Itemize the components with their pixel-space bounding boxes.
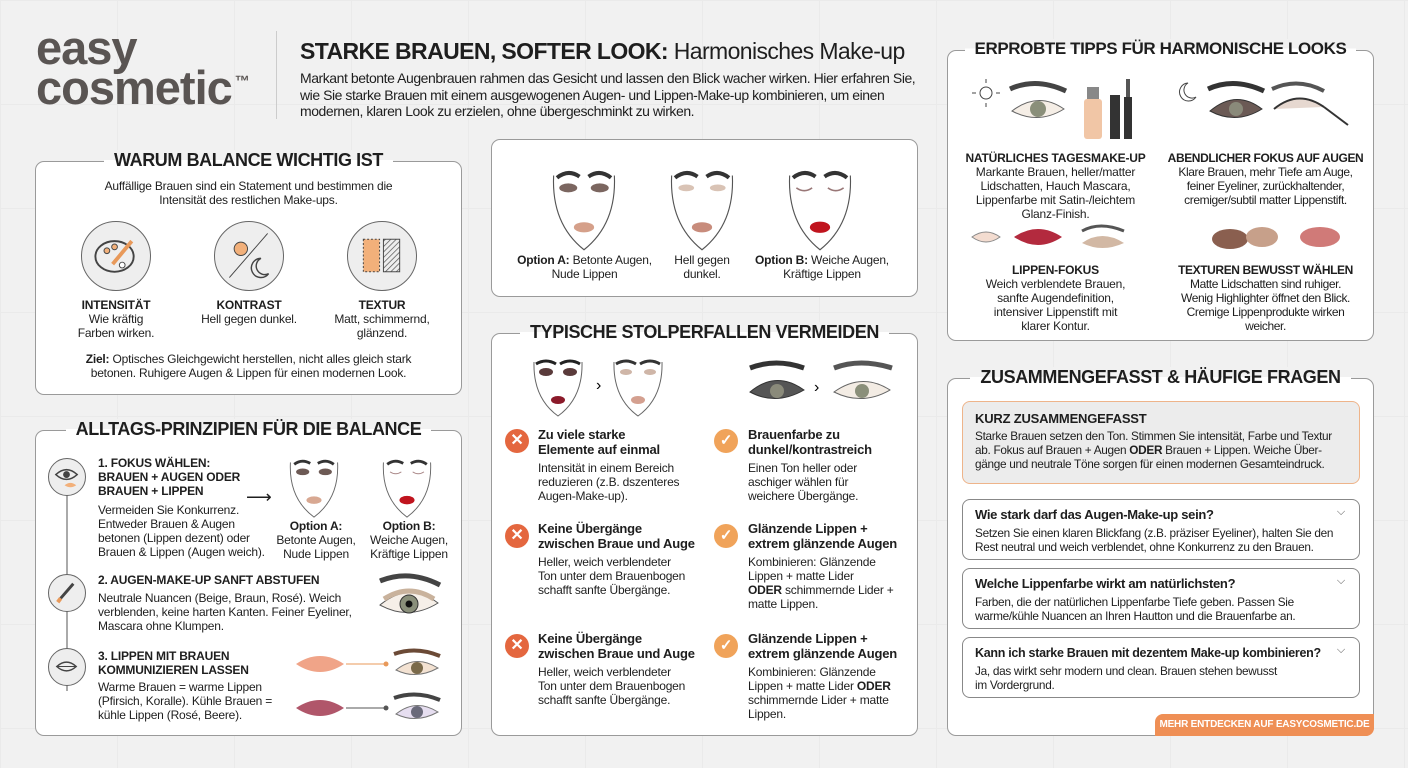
faq 1: Wie stark darf das Augen-Make-up sein? — [975, 507, 1214, 522]
panel: alltags-prinzipien: Brauen & Lippen (Augen weich). — [98, 545, 265, 559]
panel: options faces: Option A: Betonte Augen, — [517, 253, 652, 267]
panel: warum balance: Matt, schimmernd, — [334, 312, 430, 326]
panel: stolperfallen: ✕ — [510, 527, 524, 544]
button: mehr entdecken: MEHR ENTDECKEN AUF EASYCOSMETIC.DE — [1159, 719, 1370, 730]
faq 3: Kann ich starke Brauen mit dezentem Make-up kombinieren? — [975, 646, 1321, 660]
icon: texture — [347, 221, 417, 291]
panel: alltags-prinzipien: KOMMUNIZIEREN LASSEN — [98, 663, 249, 677]
panel: stolperfallen: schimmernde Lider + matte — [748, 693, 889, 707]
panel: warum balance — [35, 161, 462, 395]
panel: erprobte tipps — [947, 50, 1374, 341]
panel: erprobte tipps: ABENDLICHER FOKUS AUF AUGEN — [1168, 151, 1363, 165]
panel: stolperfallen: zwischen Braue und Auge — [538, 646, 695, 661]
panel: warum balance: Auffällige Brauen sind ein Statement und bestimmen die — [105, 179, 392, 193]
panel: warum balance: Wie kräftig — [89, 312, 143, 326]
face: neutral — [670, 170, 734, 250]
panel: alltags-prinzipien: Vermeiden Sie Konkurrenz. — [98, 503, 239, 517]
panel: stolperfallen: Elemente auf einmal — [538, 442, 660, 457]
panel: alltags-prinzipien: Option B: — [383, 519, 435, 533]
panel: stolperfallen: schafft sanfte Übergänge. — [538, 583, 670, 597]
panel: alltags-prinzipien: verblenden, keine harten Kanten. Feiner Eyeliner, — [98, 605, 352, 619]
panel: alltags-prinzipien: Option A: — [290, 519, 342, 533]
panel: stolperfallen: Intensität in einem Bereich — [538, 461, 674, 475]
panel: stolperfallen: Ton unter dem Brauenbogen — [538, 679, 685, 693]
panel: alltags-prinzipien: Neutrale Nuancen (Beige, Braun, Rosé). Weich — [98, 591, 341, 605]
panel: erprobte tipps: TEXTUREN BEWUSST WÄHLEN — [1178, 263, 1353, 277]
text: ERPROBTE TIPPS FÜR HARMONISCHE LOOKS — [975, 39, 1346, 58]
panel: erprobte tipps: Glanz-Finish. — [1021, 207, 1090, 221]
faces comparison: › — [596, 377, 601, 394]
panel: warum balance: KONTRAST — [216, 298, 282, 312]
faq 3: Ja, das wirkt sehr modern und clean. Brauen stehen bewusst — [975, 664, 1277, 678]
intro text: modernen, klaren Look zu erzielen, ohne übergeschminkt zu wirken. — [300, 103, 694, 119]
panel: alltags-prinzipien: BRAUEN + AUGEN ODER — [98, 470, 240, 484]
faces comparison — [533, 360, 663, 416]
icon: textures — [1212, 227, 1340, 249]
icon: brush — [48, 574, 86, 612]
faq 2: warme/kühle Nuancen an Ihren Hautton und die Brauenfarbe an. — [975, 609, 1295, 623]
panel: stolperfallen: schafft sanfte Übergänge. — [538, 693, 670, 707]
icon: evening look — [1179, 81, 1348, 126]
panel: erprobte tipps: Klare Brauen, mehr Tiefe am Auge, — [1178, 165, 1353, 179]
panel: alltags-prinzipien: BRAUEN + LIPPEN — [98, 484, 203, 498]
panel: alltags-prinzipien: Kräftige Lippen — [370, 547, 448, 561]
faq 3: im Vordergrund. — [975, 678, 1054, 692]
text: TYPISCHE STOLPERFALLEN VERMEIDEN — [530, 322, 879, 342]
panel: erprobte tipps: klarer Kontur. — [1021, 319, 1090, 333]
icon: day look — [972, 79, 1132, 139]
intro text: Markant betonte Augenbrauen rahmen das Gesicht und lassen den Blick wacher wirken. Hier erfahren Sie, — [300, 70, 915, 86]
text: ZUSAMMENGEFASST & HÄUFIGE FRAGEN — [980, 367, 1341, 387]
panel: erprobte tipps: sanfte Augendefinition, — [997, 291, 1114, 305]
panel: warum balance: Hell gegen dunkel. — [201, 312, 297, 326]
panel: alltags-prinzipien: Mascara ohne Klumpen. — [98, 619, 224, 633]
panel: warum balance: INTENSITÄT — [82, 298, 150, 312]
panel: erprobte tipps: Cremige Lippenprodukte wirken — [1187, 305, 1344, 319]
panel: alltags-prinzipien: ⟶ — [246, 487, 272, 507]
panel: options faces: Option B: Weiche Augen, — [755, 253, 889, 267]
panel: warum balance: Farben wirken. — [78, 326, 154, 340]
icon: lips — [48, 648, 86, 686]
panel: stolperfallen: Lippen + matte Lider ODER — [748, 679, 891, 693]
button: mehr entdecken — [1155, 714, 1374, 736]
summary box — [962, 401, 1360, 484]
panel: erprobte tipps: NATÜRLICHES TAGESMAKE-UP — [965, 151, 1146, 165]
text: ALLTAGS-PRINZIPIEN FÜR DIE BALANCE — [76, 419, 421, 439]
summary box: Starke Brauen setzen den Ton. Stimmen Sie intensität, Farbe und Textur — [975, 429, 1332, 443]
panel: alltags-prinzipien: (Pfirsich, Koralle). Kühle Brauen = — [98, 694, 272, 708]
panel: stolperfallen: Kombinieren: Glänzende — [748, 555, 876, 569]
panel: zusammengefasst & faq — [947, 378, 1374, 736]
icon: eye — [379, 573, 442, 614]
panel: stolperfallen: Glänzende Lippen + — [748, 631, 868, 646]
panel: erprobte tipps: LIPPEN-FOKUS — [1012, 263, 1099, 277]
face: option B small — [382, 460, 432, 518]
panel: options faces: Nude Lippen — [552, 267, 617, 281]
panel: warum balance: Ziel: Optisches Gleichgewicht herstellen, nicht alles gleich stark — [86, 352, 411, 366]
panel: warum balance: betonen. Ruhigere Augen & Lippen für einen modernen Look. — [91, 366, 406, 380]
icon: lips — [971, 224, 1124, 248]
panel: stolperfallen: Heller, weich verblendeter — [538, 665, 671, 679]
panel: stolperfallen: Heller, weich verblendeter — [538, 555, 671, 569]
panel: options faces: Kräftige Lippen — [783, 267, 861, 281]
panel: stolperfallen: Augen-Make-up). — [538, 489, 628, 503]
panel: erprobte tipps: cremiger/subtil matter Lippenstift. — [1184, 193, 1347, 207]
panel: options faces: Hell gegen — [674, 253, 730, 267]
title: STARKE BRAUEN, SOFTER LOOK: Harmonisches Make-up — [300, 38, 905, 64]
panel: stolperfallen: Lippen. — [748, 707, 786, 721]
panel: stolperfallen: ✕ — [510, 432, 524, 449]
faq 1 — [962, 499, 1360, 560]
panel: stolperfallen: ✓ — [720, 432, 732, 449]
panel: warum balance: Intensität des restlichen Make-ups. — [159, 193, 338, 207]
panel: erprobte tipps: Lidschatten, Hauch Mascara, — [980, 179, 1130, 193]
panel: options faces — [491, 139, 918, 297]
panel: stolperfallen: Ton unter dem Brauenbogen — [538, 569, 685, 583]
panel: erprobte tipps: Weich verblendete Brauen, — [986, 277, 1125, 291]
icon: focus — [48, 458, 86, 496]
panel: stolperfallen: dunkel/kontrastreich — [748, 442, 872, 457]
eyes comparison: › — [814, 379, 819, 396]
panel: stolperfallen: matte Lippen. — [748, 597, 818, 611]
panel: stolperfallen: Einen Ton heller oder — [748, 461, 857, 475]
panel: stolperfallen: Keine Übergänge — [538, 521, 642, 536]
panel: alltags-prinzipien: betonen (Lippen dezent) oder — [98, 531, 250, 545]
panel: stolperfallen: ✓ — [720, 527, 732, 544]
panel: alltags-prinzipien: kühle Lippen (Rosé, Beere). — [98, 708, 242, 722]
panel: erprobte tipps: intensiver Lippenstift mit — [994, 305, 1117, 319]
panel: stolperfallen: Lippen + matte Lider — [748, 569, 854, 583]
face: option A small — [290, 460, 338, 518]
faq 3 — [962, 637, 1360, 698]
panel: stolperfallen: ✕ — [510, 637, 524, 654]
panel: stolperfallen: Glänzende Lippen + — [748, 521, 868, 536]
panel: warum balance: TEXTUR — [359, 298, 405, 312]
logo — [36, 21, 249, 114]
icon: contrast — [214, 221, 284, 291]
logo: easy — [36, 21, 137, 74]
faq 1: ⌵ — [1337, 506, 1345, 518]
panel: stolperfallen: extrem glänzende Augen — [748, 536, 897, 551]
panel: alltags-prinzipien: Warme Brauen = warme Lippen — [98, 680, 262, 694]
panel: stolperfallen: Zu viele starke — [538, 427, 625, 442]
panel: stolperfallen: reduzieren (z.B. dszenteres — [538, 475, 679, 489]
panel: alltags-prinzipien: Weiche Augen, — [370, 533, 448, 547]
panel: erprobte tipps: Markante Brauen, heller/matter — [976, 165, 1135, 179]
panel: alltags-prinzipien — [35, 430, 462, 736]
panel: alltags-prinzipien: Entweder Brauen & Augen — [98, 517, 235, 531]
intro text: wie Sie starke Brauen mit einem ausgewogenen Augen- und Lippen-Make-up kombinieren, um einen — [300, 86, 884, 102]
panel: options faces: dunkel. — [683, 267, 721, 281]
summary box: ab. Fokus auf Brauen + Augen ODER Brauen + Lippen. Weiche Über- — [975, 443, 1322, 457]
lips and eyes pairing — [296, 648, 441, 719]
panel: stolperfallen: Brauenfarbe zu — [748, 427, 840, 442]
icon: palette — [81, 221, 151, 291]
panel: erprobte tipps: Wenig Highlighter öffnet den Blick. — [1181, 291, 1350, 305]
panel: stolperfallen: Keine Übergänge — [538, 631, 642, 646]
summary box: gänge und neutrale Töne sorgen für einen modernen Gesamteindruck. — [975, 457, 1325, 471]
panel: alltags-prinzipien: Betonte Augen, — [276, 533, 356, 547]
faq 2: Farben, die der natürlichen Lippenfarbe Tiefe geben. Passen Sie — [975, 595, 1294, 609]
panel: alltags-prinzipien: Nude Lippen — [283, 547, 349, 561]
summary box: KURZ ZUSAMMENGEFASST — [975, 411, 1147, 426]
face: option B — [788, 170, 852, 250]
eyes comparison — [749, 360, 893, 399]
faq 2: ⌵ — [1337, 575, 1345, 587]
faq 3: ⌵ — [1337, 644, 1345, 656]
text: WARUM BALANCE WICHTIG IST — [114, 150, 383, 170]
panel: alltags-prinzipien: 1. FOKUS WÄHLEN: — [98, 456, 210, 470]
panel: stolperfallen: zwischen Braue und Auge — [538, 536, 695, 551]
panel: stolperfallen: Kombinieren: Glänzende — [748, 665, 876, 679]
faq 1: Rest neutral und weich verblendet, ohne Konkurrenz zu den Brauen. — [975, 540, 1314, 554]
panel: erprobte tipps: Matte Lidschatten sind ruhiger. — [1190, 277, 1341, 291]
panel: erprobte tipps: Lippenfarbe mit Satin-/leichtem — [976, 193, 1135, 207]
panel: erprobte tipps: feiner Eyeliner, zurückhaltender, — [1187, 179, 1344, 193]
logo: cosmetic™ — [36, 61, 249, 114]
panel: stolperfallen: aschiger wählen für — [748, 475, 848, 489]
panel: alltags-prinzipien: 2. AUGEN-MAKE-UP SANFT ABSTUFEN — [98, 573, 319, 587]
panel: stolperfallen: ✓ — [720, 637, 732, 654]
panel: stolperfallen — [491, 333, 918, 736]
panel: erprobte tipps: weicher. — [1245, 319, 1286, 333]
panel: alltags-prinzipien: 3. LIPPEN MIT BRAUEN — [98, 649, 229, 663]
faq 2: Welche Lippenfarbe wirkt am natürlichsten? — [975, 576, 1235, 591]
panel: warum balance: glänzend. — [357, 326, 407, 340]
panel: stolperfallen: extrem glänzende Augen — [748, 646, 897, 661]
intro text — [300, 70, 915, 119]
face: option A — [552, 170, 616, 250]
panel: stolperfallen: ODER schimmernde Lider + — [748, 583, 894, 597]
faq 1: Setzen Sie einen klaren Blickfang (z.B. präziser Eyeliner), halten Sie den — [975, 526, 1333, 540]
faq 2 — [962, 568, 1360, 629]
panel: stolperfallen: weichere Übergänge. — [748, 489, 858, 503]
